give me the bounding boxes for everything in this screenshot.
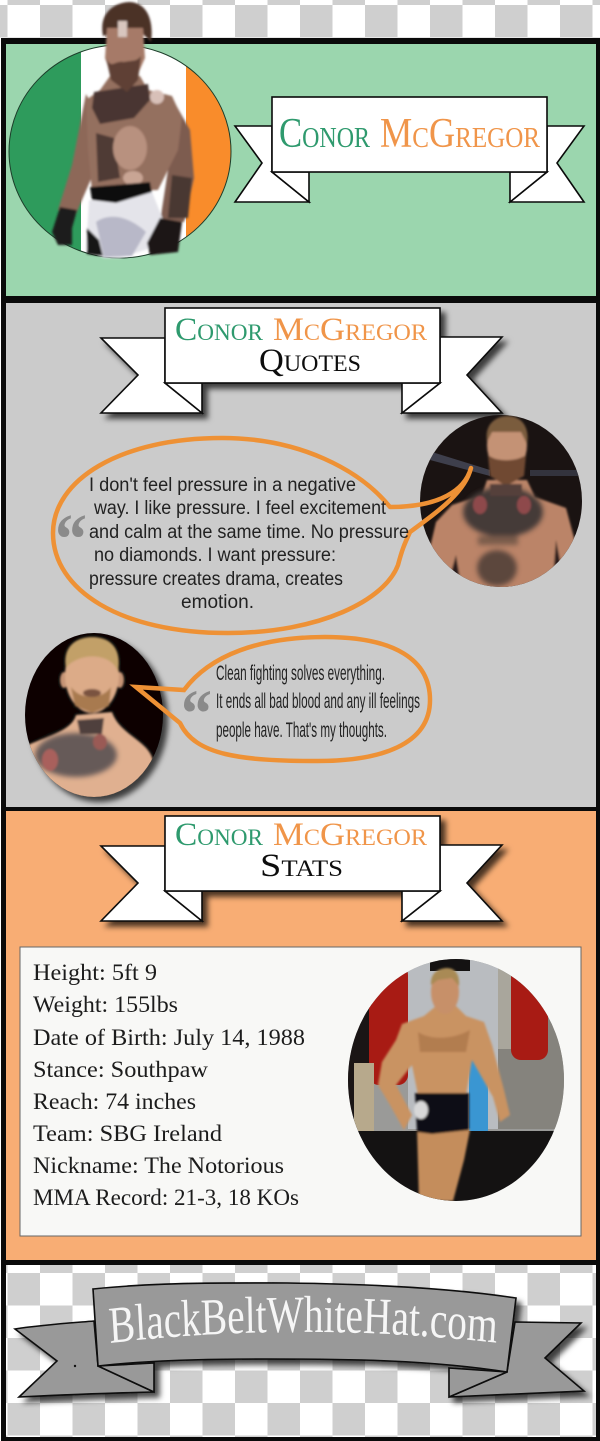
text block: second quote: people have. That's my thoughts. [216, 719, 387, 742]
text block: second quote [216, 662, 420, 742]
panel: quotes [6, 303, 596, 807]
panel: footer [6, 1265, 596, 1437]
text block: fighter stats: Stance: Southpaw [33, 1057, 208, 1083]
banner: quotes ribbon [101, 308, 502, 413]
stats card [20, 947, 581, 1236]
photo: McGregor in the gym [347, 959, 564, 1201]
fighter illustration [52, 2, 194, 258]
heading: Conor McGregor Stats [175, 817, 428, 884]
text block: first quote: I don't feel pressure in a negative [89, 475, 356, 496]
heading: Conor McGregor Stats: Conor [175, 817, 264, 853]
text block: first quote: and calm at the same time. No pressure [89, 522, 409, 543]
text block: first quote [89, 475, 409, 613]
banner: website ribbon [13, 1282, 593, 1407]
text block: first quote: emotion. [181, 592, 254, 613]
speech bubble: first quote [53, 438, 471, 633]
text block: first quote: way. I like pressure. I feel excitement [93, 498, 387, 519]
heading: Conor McGregor Stats: McGregor [273, 817, 428, 853]
checkered header strip [0, 0, 600, 38]
icon: Irish flag circle [9, 45, 232, 259]
text block: fighter stats: Team: SBG Ireland [33, 1121, 222, 1147]
icon: quotation mark: “ [181, 675, 212, 751]
panel: stats [6, 811, 596, 1260]
heading: Conor McGregor Stats: Stats [260, 848, 343, 884]
text block: fighter stats: MMA Record: 21-3, 18 KOs [33, 1185, 299, 1211]
photo: McGregor portrait, upper right [420, 415, 584, 590]
banner: stats ribbon [101, 816, 502, 921]
banner: title ribbon [235, 97, 584, 202]
text block: fighter stats: Date of Birth: July 14, 1988 [33, 1025, 305, 1051]
heading: Conor McGregor Quotes: McGregor [273, 312, 428, 348]
icon: quotation mark: “ [55, 499, 87, 579]
heading: Conor McGregor Quotes: Quotes [259, 343, 361, 379]
text block: fighter stats: Weight: 155lbs [33, 992, 178, 1018]
heading: Conor McGregor: McGregor [380, 111, 541, 157]
website name: BlackBeltWhiteHat.com [108, 1296, 496, 1343]
heading: Conor McGregor: Conor [279, 111, 371, 157]
text block: first quote: no diamonds. I want pressure: [94, 545, 336, 566]
website name [108, 1296, 496, 1343]
text block: fighter stats [33, 960, 305, 1211]
text block: second quote: Clean fighting solves everything. [216, 662, 385, 685]
photo: McGregor portrait, lower left [25, 633, 163, 800]
text block: fighter stats: Nickname: The Notorious [33, 1153, 284, 1179]
heading: Conor McGregor [279, 111, 541, 157]
heading: Conor McGregor Quotes [175, 312, 428, 379]
text block: fighter stats: Height: 5ft 9 [33, 960, 157, 986]
panel: title [6, 2, 596, 296]
text block: second quote: It ends all bad blood and any ill feelings [216, 690, 420, 713]
text block: first quote: pressure creates drama, creates [89, 569, 343, 590]
speech bubble: second quote [136, 637, 430, 761]
heading: Conor McGregor Quotes: Conor [175, 312, 264, 348]
text block: fighter stats: Reach: 74 inches [33, 1089, 196, 1115]
